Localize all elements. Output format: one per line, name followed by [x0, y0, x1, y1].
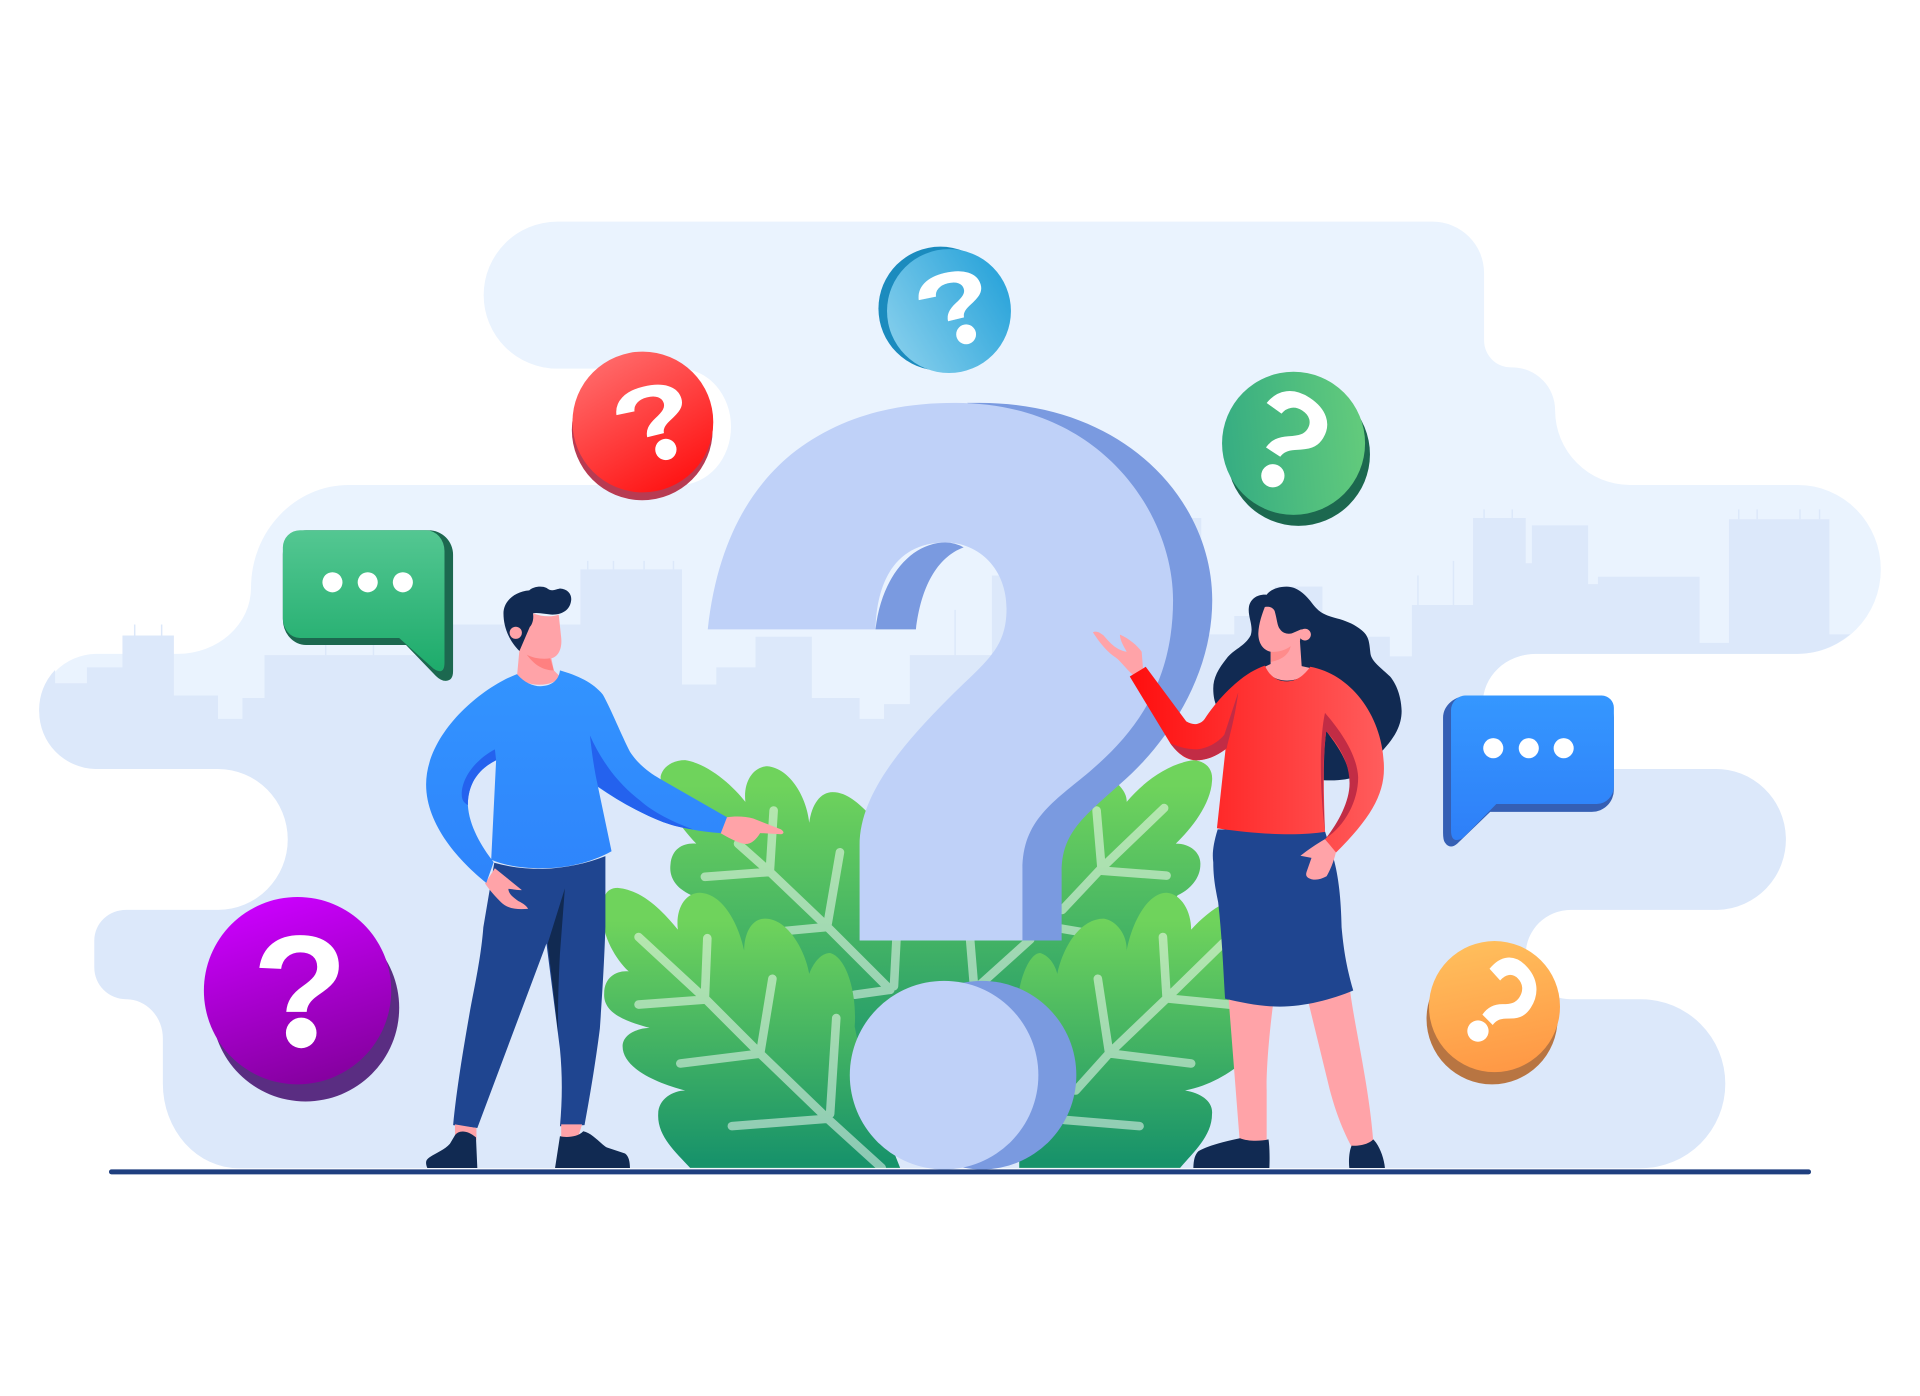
dot shadow — [888, 981, 1076, 1169]
background blobs and skyline — [39, 222, 1881, 1168]
green bubble face — [283, 530, 444, 671]
back leaf veins — [705, 808, 1167, 995]
question mark dot — [850, 981, 1076, 1169]
woman ear — [1299, 629, 1311, 640]
blue bubble face — [1451, 696, 1614, 840]
sky blue question ball: ? — [901, 245, 1009, 367]
illustration: people with question marks — [39, 222, 1881, 1174]
dot face — [850, 981, 1038, 1169]
red question ball: ? — [598, 358, 711, 486]
woman chin shadow — [1271, 646, 1291, 662]
question mark front face — [708, 403, 1173, 940]
man chin shadow — [527, 655, 554, 670]
front left leaf — [603, 888, 900, 1168]
blue bubble shadow — [1443, 696, 1614, 846]
man right sleeve shadow — [590, 735, 693, 829]
man left hand — [485, 868, 528, 909]
woman in red sweater — [1093, 587, 1402, 1168]
woman side sleeve shadow — [1321, 713, 1358, 838]
front leaf veins — [639, 937, 1229, 1168]
woman forearm shadow — [1170, 692, 1238, 760]
ground line — [111, 1170, 1809, 1174]
man left sleeve shadow — [462, 749, 496, 805]
woman legs — [1228, 990, 1373, 1150]
man right shoe — [555, 1131, 630, 1168]
front bush leaves — [603, 888, 1248, 1168]
man ear — [510, 627, 522, 639]
red question ball — [572, 352, 713, 500]
inner crescent shadow — [876, 542, 964, 629]
darker background blob with city skyline — [39, 518, 1850, 1168]
man blue shirt — [426, 670, 727, 883]
man trouser fold — [548, 888, 565, 1033]
woman left shoe — [1193, 1138, 1270, 1168]
woman red sweater — [1130, 666, 1384, 852]
green speech bubble — [283, 530, 453, 681]
green bubble shadow — [283, 530, 453, 681]
green bubble dots — [322, 572, 413, 592]
blue speech bubble — [1443, 696, 1614, 846]
back bush leaves — [661, 760, 1212, 1044]
green question ball: ? — [1212, 353, 1357, 524]
woman raised hand — [1093, 632, 1143, 675]
man ankles — [455, 1124, 582, 1140]
man left shoe — [426, 1131, 477, 1168]
man neck and face — [517, 613, 561, 685]
man pointing hand — [720, 816, 783, 844]
purple question ball: ? — [252, 904, 348, 1079]
orange question ball: ? — [1434, 919, 1565, 1094]
man trousers — [453, 856, 605, 1128]
woman back hair — [1213, 587, 1402, 780]
blue bubble dots — [1483, 738, 1574, 758]
back left leaf — [661, 760, 896, 1044]
light background blob — [39, 222, 1881, 759]
question mark shadow side — [967, 403, 1212, 940]
giant question mark — [708, 403, 1212, 940]
woman skirt — [1213, 829, 1353, 1007]
purple question ball — [204, 897, 399, 1101]
back right leaf — [1056, 760, 1212, 1044]
woman hip hand — [1300, 839, 1336, 880]
man in blue shirt — [426, 587, 783, 1168]
back centre foliage — [847, 884, 1081, 1044]
woman face and neck — [1258, 607, 1310, 681]
front right leaf — [1019, 893, 1248, 1168]
man hair — [503, 587, 571, 651]
woman right shoe — [1349, 1139, 1385, 1168]
